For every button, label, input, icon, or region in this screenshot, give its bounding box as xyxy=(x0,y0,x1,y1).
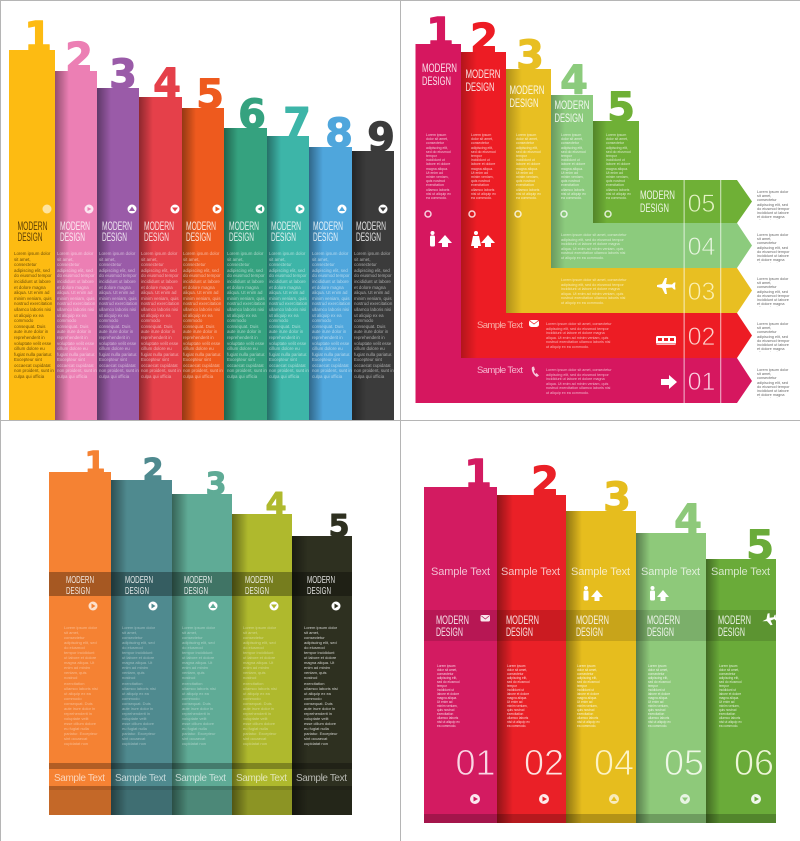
band 5 green: 5 xyxy=(607,85,635,131)
panel: five muted columns xyxy=(0,420,400,841)
modern design headings: MODERN xyxy=(307,574,335,586)
modern design headings: MODERN xyxy=(66,574,94,586)
modern design headings xyxy=(66,574,335,597)
icon: person and arrow, magenta column xyxy=(430,231,452,247)
modern design headings: MODERN xyxy=(576,613,609,627)
modern design headings: DESIGN xyxy=(647,625,674,639)
column 3 purple: MODERN xyxy=(102,221,132,233)
sample text labels: Sample Text xyxy=(571,566,630,578)
column 4 olive xyxy=(232,487,292,815)
icon: people green column xyxy=(650,586,669,601)
text block col 5: Lorem ipsum dolor sit amet, consectetur adipiscing elit, sed do eiusmod tempor incididunt ut labore et dolore magna aliqua. Ut enim ad minim veniam, quis nostrud exercitation ullamco laboris nisi ut aliquip ex ea commodo. xyxy=(606,133,631,200)
column 5 green xyxy=(706,523,776,823)
column 7 teal: 7 xyxy=(283,100,311,146)
band 1 magenta: MODERN xyxy=(422,61,457,75)
column 6 green: 6 xyxy=(238,92,266,138)
band 3 yellow: 3 xyxy=(516,33,544,79)
icon: plane xyxy=(657,278,676,294)
band 1 magenta: DESIGN xyxy=(422,74,451,88)
column 4 red: 4 xyxy=(153,61,181,107)
column 8 blue: 8 xyxy=(325,111,353,157)
step numbers: 04 xyxy=(688,233,715,261)
band 4 light green: DESIGN xyxy=(554,111,584,125)
column 9 charcoal: 9 xyxy=(367,115,395,161)
large step numbers: 02 xyxy=(524,742,564,783)
column 4 light green: 4 xyxy=(674,497,702,543)
modern design headings: DESIGN xyxy=(576,625,603,639)
icon: bus xyxy=(656,336,676,345)
text block col 3: Lorem ipsum dolor sit amet, consectetur adipiscing elit, sed do eiusmod tempor incididunt ut labore et dolore magna aliqua. Ut enim ad minim veniam, quis nostrud exercitation ullamco laboris nisi ut aliquip ex ea commodo. xyxy=(577,664,600,728)
modern design headings: MODERN xyxy=(436,613,469,627)
modern design headings xyxy=(436,613,751,639)
panel: nine numbered columns xyxy=(0,0,400,420)
heading band xyxy=(49,572,352,596)
text block col 3: Lorem ipsum dolor sit amet, consectetur adipiscing elit, sed do eiusmod tempor incididunt ut labore et dolore magna aliqua. Ut enim ad minim veniam, quis nostrud exercitation ullamco laboris nisi ut aliquip ex ea commodo. xyxy=(516,133,541,200)
column 4 olive: 4 xyxy=(266,487,286,522)
icon: plane xyxy=(761,612,778,627)
column 8 blue: DESIGN xyxy=(313,232,338,244)
sample text labels: Sample Text xyxy=(115,773,166,784)
modern design headings: MODERN xyxy=(125,574,153,586)
column 2 pink: DESIGN xyxy=(60,232,85,244)
icon: envelope xyxy=(529,320,539,327)
band 1 magenta: Sample Text xyxy=(477,365,523,376)
column 8 blue xyxy=(309,111,353,420)
text block row 2: Lorem ipsum dolor sit amet, consectetur adipiscing elit, sed do eiusmod tempor incididunt ut labore et dolore magna aliqua. Ut enim ad minim veniam, quis nostrud exercitation ullamco laboris nisi ut aliquip ex ea commodo. xyxy=(546,322,612,349)
band 2 red: DESIGN xyxy=(466,80,494,94)
text block row 1: Lorem ipsum dolor sit amet, consectetur adipiscing elit, sed do eiusmod tempor incididunt ut labore et dolore magna aliqua. Ut enim ad minim veniam, quis nostrud exercitation ullamco laboris nisi ut aliquip ex ea commodo. xyxy=(546,368,612,395)
step numbers: 01 xyxy=(688,368,715,396)
modern design headings: MODERN xyxy=(718,613,751,627)
large step numbers: 04 xyxy=(594,742,634,783)
column 3 yellow: 3 xyxy=(603,475,631,521)
column 5 dark olive xyxy=(292,509,352,815)
modern design headings: DESIGN xyxy=(245,585,269,597)
band 4 light green: MODERN xyxy=(554,98,590,112)
band 1 magenta xyxy=(416,10,752,403)
column 4 red: DESIGN xyxy=(144,232,169,244)
lower bands xyxy=(49,763,352,815)
column 5 orange: DESIGN xyxy=(186,232,211,244)
column 9 charcoal xyxy=(352,115,395,420)
band 4 light green xyxy=(551,58,752,268)
step numbers: 05 xyxy=(688,190,715,218)
column 1 orange xyxy=(49,446,111,815)
bottom band xyxy=(424,814,776,823)
column 3 yellow xyxy=(566,475,636,823)
sample text labels xyxy=(54,773,347,784)
band 2 red: MODERN xyxy=(466,67,500,81)
column 2 pink: MODERN xyxy=(60,221,90,233)
modern design headings: DESIGN xyxy=(718,625,745,639)
band 3 yellow: MODERN xyxy=(510,83,544,97)
column 1 yellow: 1 xyxy=(24,14,52,60)
column 3 sea green xyxy=(172,467,232,815)
column 2 pink xyxy=(55,35,97,420)
modern design headings: DESIGN xyxy=(66,585,90,597)
panel: five bright columns xyxy=(400,420,800,841)
text block col 2: Lorem ipsum dolor sit amet, consectetur adipiscing elit, sed do eiusmod tempor incididunt ut labore et dolore magna aliqua. Ut enim ad minim veniam, quis nostrud exercitation ullamco laboris nisi ut aliquip ex ea commodo. xyxy=(507,664,530,728)
icon: envelope xyxy=(480,615,490,622)
large step numbers: 05 xyxy=(664,742,704,783)
sample text labels xyxy=(431,566,770,578)
column 1 magenta xyxy=(424,452,497,823)
column 2 blue-teal xyxy=(111,453,172,815)
modern design headings: MODERN xyxy=(245,574,273,586)
column 1 orange: 1 xyxy=(85,446,105,481)
large step numbers: 01 xyxy=(455,742,496,783)
column 6 green: DESIGN xyxy=(229,232,254,244)
column 4 light green xyxy=(636,497,706,823)
column 5 orange xyxy=(182,72,224,420)
band 3 yellow: DESIGN xyxy=(510,96,538,110)
column 6 green: MODERN xyxy=(229,221,259,233)
band 2 red: Sample Text xyxy=(477,320,523,331)
icon: people yellow column xyxy=(584,586,603,601)
band 2 red xyxy=(461,16,752,358)
modern design headings: DESIGN xyxy=(436,625,463,639)
column 3 purple: 3 xyxy=(109,52,137,98)
column 4 red xyxy=(139,61,182,420)
column 7 teal: MODERN xyxy=(271,221,301,233)
modern design headings: DESIGN xyxy=(307,585,331,597)
band 5 green: DESIGN xyxy=(640,201,669,215)
sample text labels: Sample Text xyxy=(296,773,347,784)
modern design headings: MODERN xyxy=(184,574,212,586)
column 1 yellow: MODERN xyxy=(18,221,48,233)
column 2 red: 2 xyxy=(531,459,559,505)
column 1 magenta: 1 xyxy=(464,452,492,498)
text block col 4: Lorem ipsum dolor sit amet, consectetur adipiscing elit, sed do eiusmod tempor incididunt ut labore et dolore magna aliqua. Ut enim ad minim veniam, quis nostrud exercitation ullamco laboris nisi ut aliquip ex ea commodo. xyxy=(561,133,586,200)
band 5 green: MODERN xyxy=(640,188,675,202)
step numbers: 03 xyxy=(688,278,715,306)
column 6 green xyxy=(224,92,267,420)
column 7 teal: DESIGN xyxy=(271,232,296,244)
band 4 light green: 4 xyxy=(560,58,588,104)
icon: right arrow xyxy=(661,375,677,389)
modern design headings: DESIGN xyxy=(506,625,533,639)
column 2 pink: 2 xyxy=(65,35,93,81)
text block row 4: Lorem ipsum dolor sit amet, consectetur adipiscing elit, sed do eiusmod tempor incididunt ut labore et dolore magna aliqua. Ut enim ad minim veniam, quis nostrud exercitation ullamco laboris nisi ut aliquip ex ea commodo. xyxy=(561,233,627,260)
column 5 dark olive: 5 xyxy=(329,509,349,544)
column 7 teal xyxy=(267,100,311,420)
sample text labels: Sample Text xyxy=(175,773,226,784)
vertical rules xyxy=(684,180,721,403)
large step numbers xyxy=(455,742,774,783)
step numbers: 02 xyxy=(688,323,715,351)
sample text labels: Sample Text xyxy=(431,566,490,578)
column 9 charcoal: DESIGN xyxy=(356,232,381,244)
text block row 3: Lorem ipsum dolor sit amet, consectetur adipiscing elit, sed do eiusmod tempor incididunt ut labore et dolore magna aliqua. Ut enim ad minim veniam, quis nostrud exercitation ullamco laboris nisi ut aliquip ex ea commodo. xyxy=(561,278,627,305)
play buttons xyxy=(470,794,761,804)
band 3 yellow xyxy=(506,33,752,313)
band 5 green xyxy=(593,85,752,223)
sample text labels: Sample Text xyxy=(236,773,287,784)
column 3 sea green: 3 xyxy=(206,467,226,502)
icon: phone xyxy=(532,366,539,377)
text block col 1: Lorem ipsum dolor sit amet, consectetur adipiscing elit, sed do eiusmod tempor incididunt ut labore et dolore magna aliqua. Ut enim ad minim veniam, quis nostrud exercitation ullamco laboris nisi ut aliquip ex ea commodo. xyxy=(437,664,460,728)
column 8 blue: MODERN xyxy=(313,221,343,233)
column 2 blue-teal: 2 xyxy=(143,453,163,488)
large step numbers: 06 xyxy=(734,742,774,783)
band 2 red: 2 xyxy=(470,16,498,62)
modern design headings: MODERN xyxy=(506,613,539,627)
text block col 1: Lorem ipsum dolor sit amet, consectetur adipiscing elit, sed do eiusmod tempor incididunt ut labore et dolore magna aliqua. Ut enim ad minim veniam, quis nostrud exercitation ullamco laboris nisi ut aliquip ex ea commodo. xyxy=(426,133,451,200)
text block col 4: Lorem ipsum dolor sit amet, consectetur adipiscing elit, sed do eiusmod tempor incididunt ut labore et dolore magna aliqua. Ut enim ad minim veniam, quis nostrud exercitation ullamco laboris nisi ut aliquip ex ea commodo. xyxy=(648,664,671,728)
icon: person and arrow, red column xyxy=(471,231,495,248)
text block col 5: Lorem ipsum dolor sit amet, consectetur adipiscing elit, sed do eiusmod tempor incididunt ut labore et dolore magna aliqua. Ut enim ad minim veniam, quis nostrud exercitation ullamco laboris nisi ut aliquip ex ea commodo. xyxy=(719,664,742,728)
modern design headings: DESIGN xyxy=(125,585,149,597)
heading band xyxy=(424,610,776,641)
modern design headings: DESIGN xyxy=(184,585,208,597)
sample text labels: Sample Text xyxy=(501,566,560,578)
panel: stepped L-shaped arrows xyxy=(400,0,800,420)
play buttons xyxy=(88,602,340,610)
column 5 green: 5 xyxy=(746,523,774,569)
modern design headings: MODERN xyxy=(647,613,680,627)
column 2 red xyxy=(497,459,566,823)
column 4 red: MODERN xyxy=(144,221,174,233)
column 3 purple: DESIGN xyxy=(102,232,127,244)
step numbers xyxy=(688,190,715,396)
column 1 yellow: DESIGN xyxy=(18,232,42,244)
column 5 orange: MODERN xyxy=(186,221,216,233)
text block col 2: Lorem ipsum dolor sit amet, consectetur adipiscing elit, sed do eiusmod tempor incididunt ut labore et dolore magna aliqua. Ut enim ad minim veniam, quis nostrud exercitation ullamco laboris nisi ut aliquip ex ea commodo. xyxy=(471,133,496,200)
column 1 yellow xyxy=(9,14,55,420)
sample text labels: Sample Text xyxy=(641,566,700,578)
sample text labels: Sample Text xyxy=(54,773,105,784)
band 1 magenta: 1 xyxy=(426,10,454,56)
column 5 orange: 5 xyxy=(196,72,224,118)
column 3 purple xyxy=(97,52,139,420)
sample text labels: Sample Text xyxy=(711,566,770,578)
